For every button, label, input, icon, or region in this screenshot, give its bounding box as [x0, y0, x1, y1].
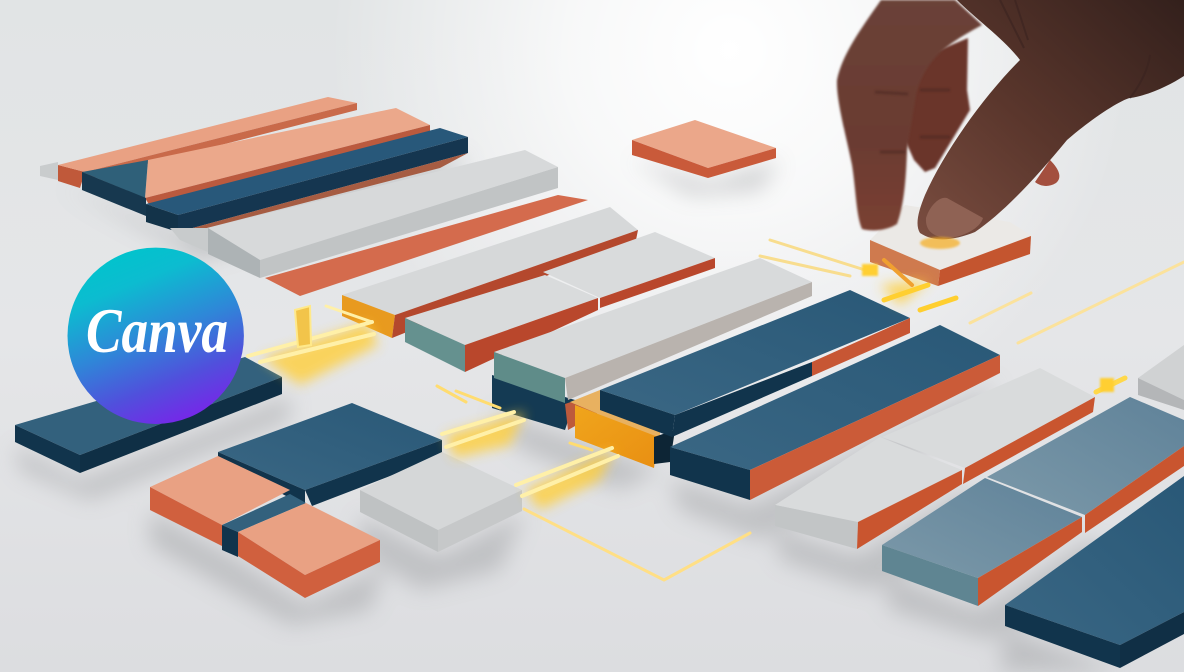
block: blue tile bottom right [1005, 476, 1184, 668]
block: blue slab behind logo [15, 357, 282, 473]
strip: salmon upper [58, 97, 357, 172]
glow: bright lines [248, 240, 1184, 580]
hand: index finger [837, 0, 982, 230]
block: white short bar left [405, 275, 598, 372]
block: white tile upper right [882, 368, 1095, 484]
logo: Canva badge [68, 248, 244, 424]
block: white short bar right [543, 232, 715, 308]
hand: amber reflection [920, 237, 960, 249]
glow: right-hand nodes [862, 264, 1114, 392]
block: salmon tile left [150, 456, 290, 546]
block: blue tile centre-left [218, 403, 442, 506]
block: white tile bottom centre [360, 452, 522, 552]
block: teal tile lower [882, 478, 1082, 606]
strip: blue triangle [82, 160, 148, 198]
logo: wordmark: Canva [86, 295, 228, 366]
block: small blue connector [222, 494, 306, 557]
block: white block right edge [1138, 345, 1184, 410]
block: floating salmon square [632, 120, 776, 178]
hand: middle finger behind [905, 38, 970, 172]
hand: ring fingertip [1035, 160, 1059, 186]
hand: knuckle creases [875, 90, 950, 152]
glow: soft pools [262, 280, 930, 510]
block: dark base under long white bar [492, 375, 600, 430]
glow: small upright prism [295, 306, 311, 347]
strip: blue long [146, 128, 468, 215]
logo: gradient circle [68, 248, 244, 424]
block: white long bar upper [208, 150, 588, 296]
block: long white bar centre [494, 258, 812, 403]
block: amber lit block [570, 390, 675, 468]
block: teal tile upper [987, 397, 1184, 533]
block: white tile lower left [775, 437, 962, 549]
block group: top-left stacked strips [40, 97, 468, 252]
glow: light traces [248, 240, 1184, 580]
block: blue bar lower [670, 325, 1000, 500]
hand: finger folds [1000, 0, 1150, 98]
hand [837, 0, 1184, 249]
block: salmon tile lower [238, 503, 380, 598]
block: white block under fingers [870, 205, 1032, 286]
block: white bar with amber end [342, 207, 638, 338]
strip: salmon wide [145, 108, 430, 198]
hand: thumb and palm [918, 0, 1184, 239]
block: blue bar centre [600, 290, 910, 437]
soft shadows under blocks [15, 155, 1130, 672]
hand: thumb nail [926, 198, 983, 238]
